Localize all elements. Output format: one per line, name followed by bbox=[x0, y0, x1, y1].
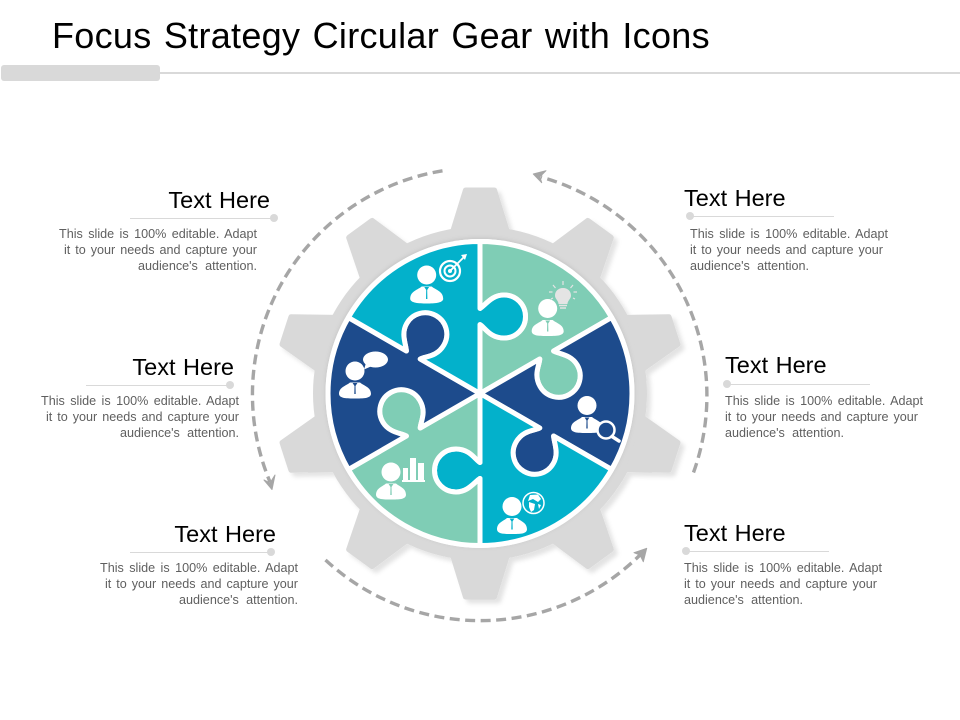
dashed arrow: right arc bbox=[533, 171, 707, 472]
puzzle piece: right navy bbox=[477, 318, 677, 509]
icon: person with magnifier bbox=[571, 396, 619, 441]
puzzle piece: top right green bbox=[480, 242, 612, 397]
puzzle wheel bbox=[283, 204, 677, 583]
text block: bottom right: it to your needs and capture your bbox=[684, 577, 877, 591]
icon: person with bar chart bbox=[376, 458, 425, 500]
text block: middle right: Text Here bbox=[725, 352, 827, 378]
text block: bottom left: Text Here bbox=[174, 521, 276, 547]
text block: top right: This slide is 100% editable. Adapt bbox=[690, 227, 888, 241]
text block: middle left: audience's attention. bbox=[120, 426, 239, 440]
text block: middle right: This slide is 100% editable. Adapt bbox=[725, 394, 923, 408]
text block: top right: it to your needs and capture your bbox=[690, 243, 883, 257]
text block: bottom left: This slide is 100% editable. Adapt bbox=[100, 561, 298, 575]
white ring behind puzzle bbox=[326, 239, 634, 548]
puzzle piece: left navy bbox=[283, 278, 483, 470]
puzzle piece: lower left green bbox=[348, 390, 480, 546]
text block: middle right: audience's attention. bbox=[725, 426, 844, 440]
text block: middle left: Text Here bbox=[132, 354, 234, 380]
dashed arrow: left arc bbox=[252, 171, 442, 490]
text block: bottom right: audience's attention. bbox=[684, 593, 803, 607]
gear bbox=[275, 188, 685, 600]
text block: top left: This slide is 100% editable. Adapt bbox=[59, 227, 257, 241]
icon: person with speech bubble bbox=[339, 352, 388, 398]
text block: middle left: This slide is 100% editable. Adapt bbox=[41, 394, 239, 408]
header rule bbox=[160, 72, 960, 74]
icon: person with light bulb bbox=[532, 281, 577, 336]
icon: person with target bbox=[410, 254, 467, 304]
text block: bottom right: This slide is 100% editable. Adapt bbox=[684, 561, 882, 575]
text block: top right: Text Here bbox=[684, 185, 786, 211]
text block: bottom right: Text Here bbox=[684, 520, 786, 546]
header bar bbox=[1, 65, 160, 81]
text block: middle left: it to your needs and capture your bbox=[46, 410, 239, 424]
text block: bottom left: it to your needs and capture your bbox=[105, 577, 298, 591]
icon: person with globe bbox=[497, 492, 544, 534]
text block: bottom left: audience's attention. bbox=[179, 593, 298, 607]
text block: top left: Text Here bbox=[168, 187, 270, 213]
puzzle piece: lower right teal bbox=[411, 392, 612, 583]
text block: top left: audience's attention. bbox=[138, 259, 257, 273]
text block: top right: audience's attention. bbox=[690, 259, 809, 273]
dashed arrow: bottom arc bbox=[326, 548, 647, 621]
text block: middle right: it to your needs and capture your bbox=[725, 410, 918, 424]
puzzle piece: top left teal bbox=[348, 204, 549, 395]
title: Focus Strategy Circular Gear with Icons bbox=[52, 15, 710, 56]
text block: top left: it to your needs and capture your bbox=[64, 243, 257, 257]
